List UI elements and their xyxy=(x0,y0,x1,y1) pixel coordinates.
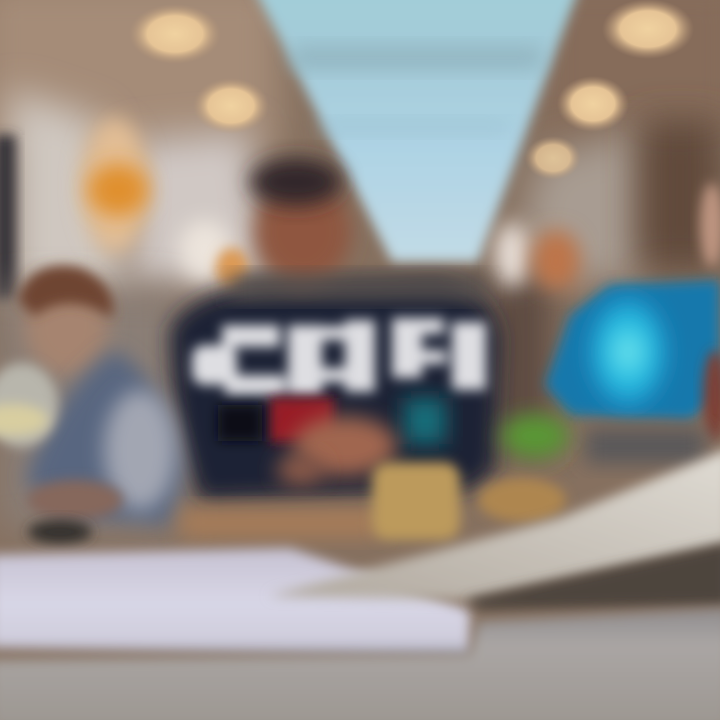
man's hand xyxy=(276,416,397,486)
skylight xyxy=(250,0,582,262)
man in centre xyxy=(170,158,500,500)
glowing blue screen xyxy=(545,183,720,464)
wine glass xyxy=(0,363,58,447)
ceiling lights xyxy=(129,0,694,180)
table edge xyxy=(180,508,380,538)
red and teal shirt details xyxy=(218,398,446,444)
lavender paper, lower left xyxy=(0,548,470,658)
golden food and drink xyxy=(372,462,566,540)
orange hanging lamp xyxy=(81,117,580,290)
white shirt lettering xyxy=(192,318,486,395)
white tray, lower right xyxy=(268,448,720,610)
grey foreground surface xyxy=(0,608,720,720)
green salad xyxy=(501,414,569,458)
left person xyxy=(18,266,185,544)
